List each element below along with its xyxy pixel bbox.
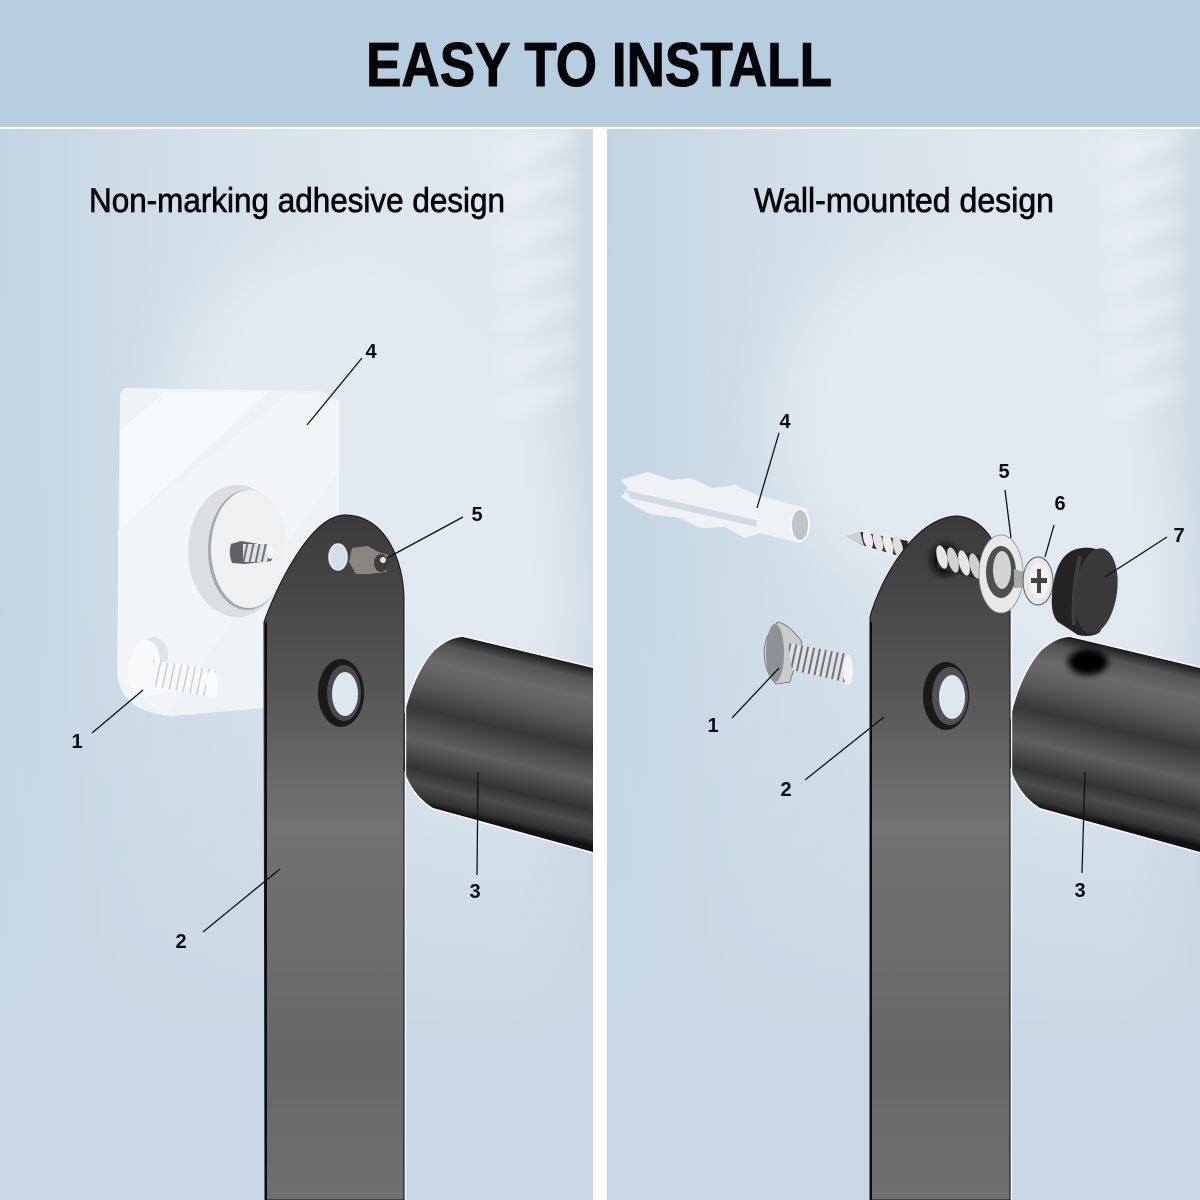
panel: non-marking adhesive design — [0, 125, 593, 1200]
callout numbers: 6 — [1054, 493, 1066, 515]
callout numbers: 7 — [1173, 525, 1185, 547]
heading: adhesive design: Non-marking adhesive design — [89, 182, 505, 220]
callout numbers: 5 — [471, 504, 483, 526]
adhesive plate — [117, 388, 340, 716]
callout numbers: 5 — [998, 461, 1010, 483]
tube 3 — [401, 637, 593, 852]
callout numbers: 2 — [780, 779, 792, 801]
bracket hole — [318, 659, 364, 727]
heading: wall-mounted design: Wall-mounted design — [754, 182, 1054, 220]
washer 5 — [979, 535, 1030, 613]
screw head 6 — [1023, 557, 1053, 605]
bolt 1 — [128, 637, 218, 698]
wall plug 4 — [621, 472, 809, 543]
slot and screw 5 — [329, 544, 388, 574]
panel: wall-mounted design — [607, 125, 1200, 1200]
callout numbers: 3 — [1074, 880, 1086, 902]
bracket hole — [923, 662, 969, 730]
title: EASY TO INSTALL — [366, 31, 832, 100]
callout numbers: 3 — [469, 881, 481, 903]
callout numbers: 2 — [175, 931, 187, 953]
callout numbers: 4 — [365, 341, 377, 363]
long screw behind bracket — [847, 528, 908, 560]
bolt 1 — [764, 622, 853, 685]
mounting bracket 2 — [264, 515, 406, 1200]
screw through bracket — [931, 544, 985, 581]
mounting bracket 2 — [870, 516, 1012, 1200]
black cap 7 — [1052, 545, 1123, 637]
callout numbers: 1 — [707, 715, 719, 737]
tube 3 — [1008, 637, 1200, 852]
callout numbers: 4 — [779, 411, 791, 433]
header band — [0, 0, 1200, 127]
callout numbers: 1 — [71, 731, 83, 753]
callout numbers — [71, 341, 483, 953]
callout numbers — [707, 411, 1185, 902]
magnetic mount with stud — [188, 485, 287, 617]
